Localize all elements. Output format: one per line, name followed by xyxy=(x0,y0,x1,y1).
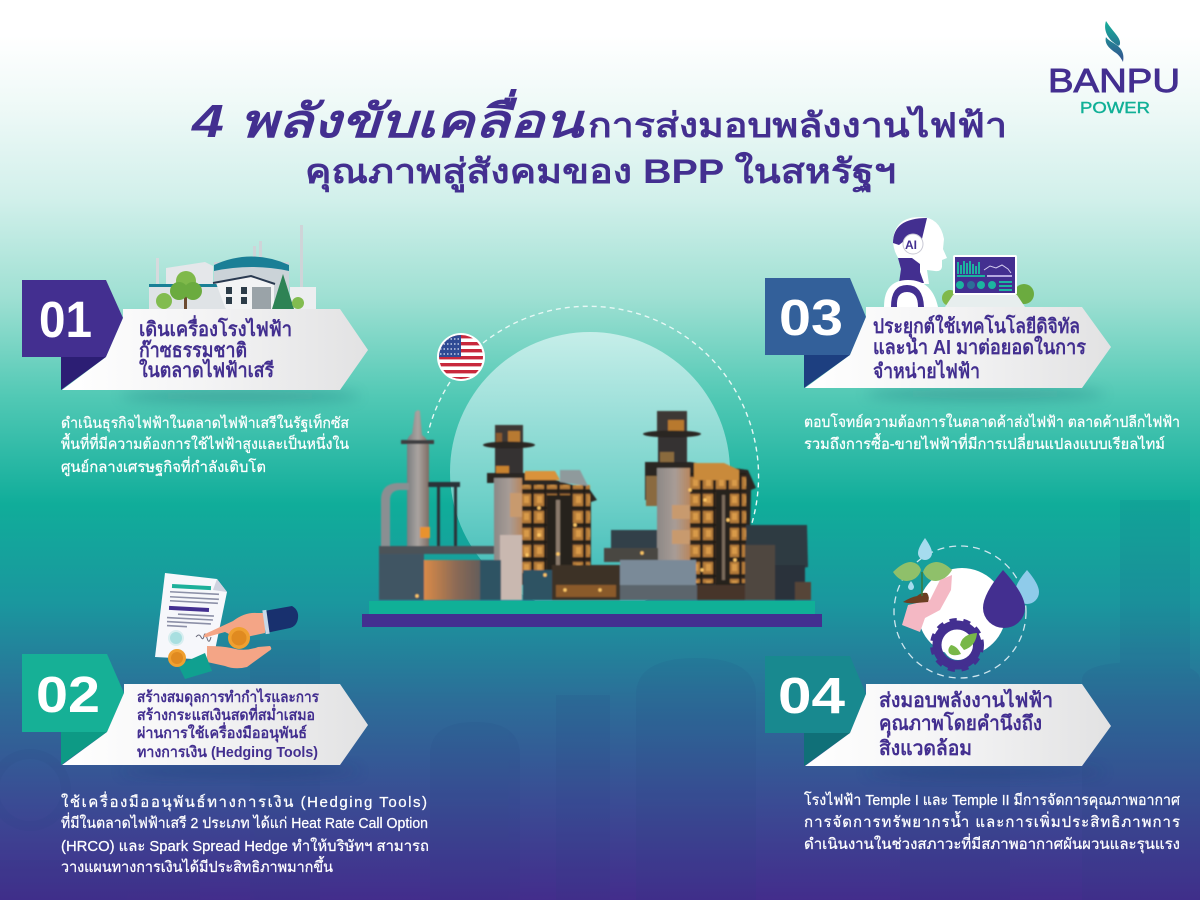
dashed orbit left xyxy=(428,382,450,433)
banner heading: สิ่งแวดล้อม xyxy=(879,733,972,760)
title line 1 rest: การส่งมอบพลังงานไฟฟ้า xyxy=(588,105,1007,145)
background: faint power plant silhouette xyxy=(0,500,1200,900)
icon: US flag xyxy=(437,333,485,381)
lights xyxy=(415,488,737,598)
badge fold xyxy=(61,357,106,390)
title line 2: คุณภาพสู่สังคมของ BPP ในสหรัฐฯ xyxy=(305,151,896,194)
number 03: 03 xyxy=(779,289,843,346)
icon: power plant xyxy=(149,225,316,310)
platform teal xyxy=(369,601,815,614)
number badge 03 xyxy=(765,278,866,355)
badge fold xyxy=(61,732,107,765)
banner heading: จำหน่ายไฟฟ้า xyxy=(873,359,980,383)
central illustration: power plant xyxy=(362,306,822,627)
title xyxy=(191,88,1007,194)
middle building xyxy=(611,530,657,550)
description: ดำเนินธุรกิจไฟฟ้าในตลาดไฟฟ้าเสรีในรัฐเท็กซัส xyxy=(61,413,349,433)
banner heading: ก๊าซธรรมชาติ xyxy=(139,340,247,362)
banner xyxy=(62,684,368,765)
tower A xyxy=(495,425,523,447)
badge fold xyxy=(804,733,850,766)
description: ศูนย์กลางเศรษฐกิจที่กำลังเติบโต xyxy=(61,456,266,476)
description: (HRCO) และ Spark Spread Hedge ทำให้บริษัทฯ สามารถ xyxy=(61,837,429,855)
AI label: AI xyxy=(905,238,917,252)
number badge 04 xyxy=(765,656,866,733)
description: ดำเนินงานในช่วงสภาวะที่มีสภาพอากาศผันผวนและรุนแรง xyxy=(804,833,1180,854)
logo wordmark: BANPU xyxy=(1048,62,1180,99)
banner heading: และนำ AI มาต่อยอดในการ xyxy=(873,335,1086,359)
dashed orbit right xyxy=(483,306,759,523)
banner heading: ผ่านการใช้เครื่องมืออนุพันธ์ xyxy=(137,722,307,743)
banner heading xyxy=(873,314,1086,383)
banner shadow xyxy=(120,390,360,402)
number 02: 02 xyxy=(36,666,100,723)
panel 04: environment xyxy=(765,538,1180,854)
description xyxy=(61,413,349,476)
number 04: 04 xyxy=(778,667,846,724)
number badge 02 xyxy=(22,654,124,732)
icon: contract and hands xyxy=(155,573,298,679)
description xyxy=(804,413,1180,453)
banner shadow xyxy=(120,766,360,776)
panel 02: hedging tools xyxy=(22,573,429,876)
pale circle behind plant xyxy=(450,332,730,612)
number 01: 01 xyxy=(39,291,92,348)
banner shadow xyxy=(865,767,1105,777)
title line 1 emphasised: 4 พลังขับเคลื่อน xyxy=(191,88,586,147)
banner xyxy=(805,307,1111,388)
description: โรงไฟฟ้า Temple I และ Temple II มีการจัดการคุณภาพอากาศ xyxy=(804,791,1180,810)
banner heading: คุณภาพโดยคำนึงถึง xyxy=(879,711,1042,736)
photo: gas power plant xyxy=(379,410,811,600)
platform purple xyxy=(362,614,822,627)
description: รวมถึงการซื้อ-ขายไฟฟ้าที่มีการเปลี่ยนแปลงแบบเรียลไทม์ xyxy=(804,433,1165,453)
badge fold xyxy=(804,355,850,388)
description xyxy=(804,791,1180,854)
description: พื้นที่ที่มีความต้องการใช้ไฟฟ้าสูงและเป็นหนึ่งใน xyxy=(61,433,349,453)
description: ที่มีในตลาดไฟฟ้าเสรี 2 ประเภท ได้แก่ Heat Rate Call Option xyxy=(61,812,428,832)
banner heading xyxy=(137,687,320,761)
banner heading: เดินเครื่องโรงไฟฟ้า xyxy=(139,314,292,341)
banner heading: ทางการเงิน (Hedging Tools) xyxy=(137,743,318,761)
description xyxy=(61,791,429,876)
banner heading: ส่งมอบพลังงานไฟฟ้า xyxy=(879,688,1053,712)
description: ใช้เครื่องมืออนุพันธ์ทางการเงิน (Hedging Tools) xyxy=(61,791,427,812)
banner xyxy=(62,309,368,390)
banner heading xyxy=(879,688,1053,760)
banner shadow xyxy=(865,388,1105,400)
logo: Banpu Power xyxy=(1048,21,1180,117)
left low building xyxy=(379,553,424,600)
banner heading xyxy=(139,314,292,382)
description: การจัดการทรัพยากรน้ำ และการเพิ่มประสิทธิภาพการ xyxy=(804,811,1180,831)
description: วางแผนทางการเงินได้มีประสิทธิภาพมากขึ้น xyxy=(61,856,333,876)
banner xyxy=(805,684,1111,766)
number badge 01 xyxy=(22,280,123,357)
left stack xyxy=(407,410,429,550)
banner heading: ในตลาดไฟฟ้าเสรี xyxy=(139,358,274,382)
panel 01: natural gas plant xyxy=(22,225,368,476)
banner heading: สร้างสมดุลการทำกำไรและการ xyxy=(137,687,320,707)
icon: AI robot and laptop xyxy=(884,217,1034,307)
icon: logo leaf xyxy=(1105,21,1123,62)
right building xyxy=(746,525,808,570)
logo subtitle: POWER xyxy=(1080,100,1150,117)
tower B xyxy=(657,411,687,433)
banner heading: ประยุกต์ใช้เทคโนโลยีดิจิทัล xyxy=(873,314,1080,339)
description: ตอบโจทย์ความต้องการในตลาดค้าส่งไฟฟ้า ตลาดค้าปลีกไฟฟ้า xyxy=(804,413,1180,431)
panel 03: digital and AI xyxy=(765,217,1180,453)
icon: environment circle xyxy=(893,538,1039,678)
banner heading: สร้างกระแสเงินสดที่สม่ำเสมอ xyxy=(137,704,315,724)
